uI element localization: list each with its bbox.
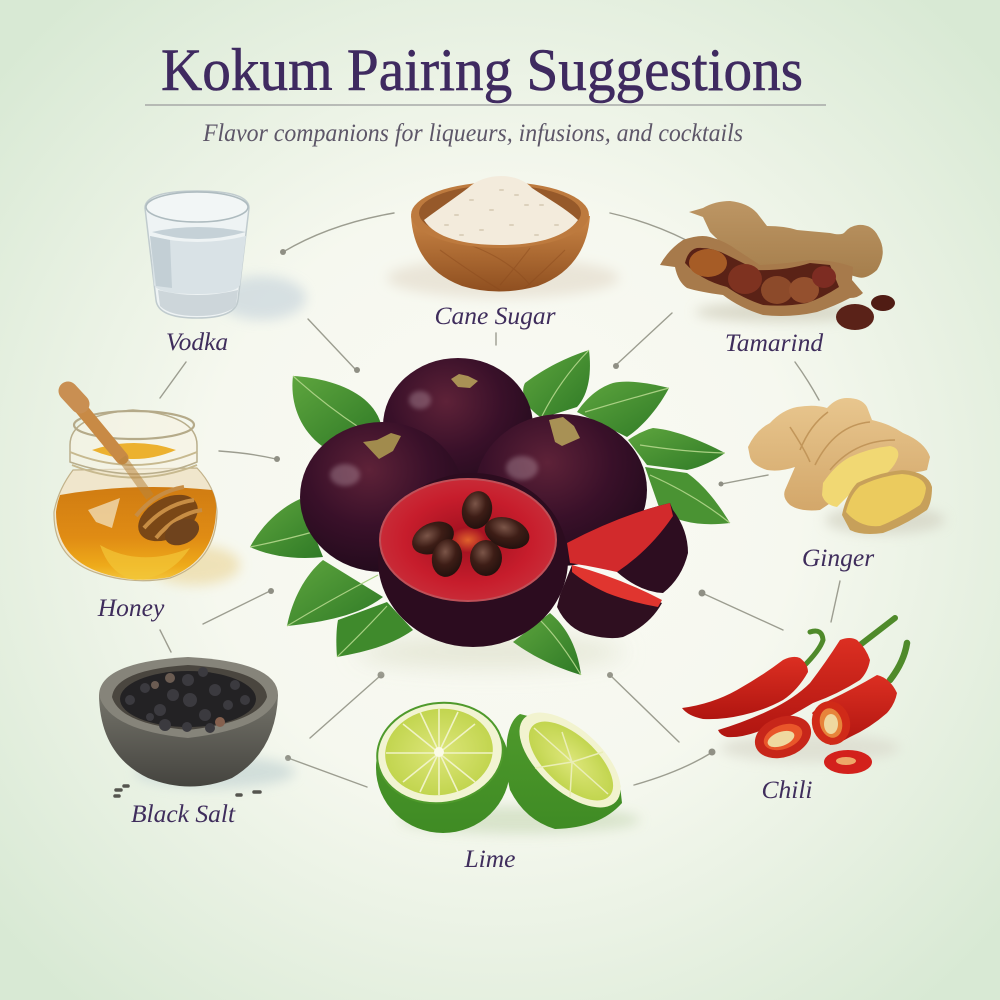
leaf top right xyxy=(577,382,669,437)
leaf right lower xyxy=(645,467,730,524)
label: Black Salt: Black Salt xyxy=(131,799,236,828)
fruit: cut half xyxy=(378,473,568,647)
connector lines xyxy=(160,213,840,787)
label: Lime: Lime xyxy=(464,844,516,873)
leaf bottom right xyxy=(513,613,581,675)
fruit: left xyxy=(300,422,464,572)
icon: cane sugar bowl xyxy=(387,176,619,298)
leaf top centre xyxy=(523,350,590,418)
icon: honey jar xyxy=(54,391,240,585)
leaf left xyxy=(250,499,323,558)
leaf bottom left xyxy=(336,602,413,657)
icon: kokum fruits with leaves xyxy=(250,350,730,675)
icon: ginger xyxy=(748,398,945,534)
label: Vodka: Vodka xyxy=(166,327,228,356)
title: Kokum Pairing Suggestions xyxy=(161,37,803,103)
fruit slices xyxy=(557,503,688,638)
icon: black salt bowl xyxy=(99,657,295,796)
icon: tamarind xyxy=(660,201,895,330)
icon: lime xyxy=(371,695,640,834)
leaf lower left xyxy=(287,560,383,626)
label: Chili: Chili xyxy=(761,775,813,804)
icon: vodka glass xyxy=(145,191,306,320)
label: Honey: Honey xyxy=(97,593,165,622)
fruit: right xyxy=(475,414,647,566)
icon: chili xyxy=(682,618,907,774)
leaf right upper xyxy=(628,428,725,470)
subtitle: Flavor companions for liqueurs, infusions, and cocktails xyxy=(202,120,743,147)
leaf top left xyxy=(292,376,381,446)
label: Cane Sugar: Cane Sugar xyxy=(434,301,556,330)
fruit: back xyxy=(383,358,533,494)
label: Ginger: Ginger xyxy=(802,543,874,572)
label: Tamarind: Tamarind xyxy=(725,328,823,357)
